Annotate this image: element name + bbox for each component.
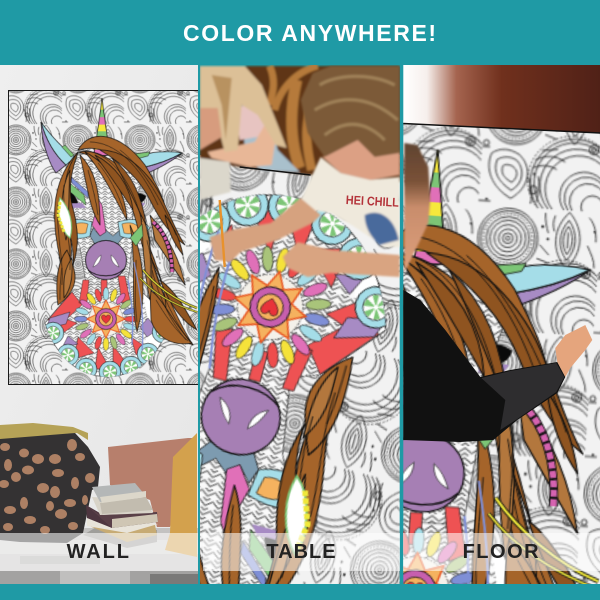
poster edge	[403, 124, 600, 133]
label band: wall: WALL	[67, 540, 131, 562]
black sleeve	[403, 290, 565, 442]
chair	[270, 66, 318, 170]
girl	[200, 66, 300, 172]
book stack	[83, 483, 158, 548]
panel: table	[200, 65, 400, 584]
poster on table	[200, 155, 400, 584]
hand	[555, 325, 592, 377]
label band: table: TABLE	[266, 540, 337, 562]
poster on floor	[403, 120, 600, 584]
poster on wall	[8, 90, 198, 385]
supplies box	[200, 158, 231, 200]
pillow	[108, 438, 197, 527]
label band: table	[203, 533, 400, 571]
panel: wall	[0, 65, 198, 584]
dark patterned bag	[0, 433, 100, 543]
poster edge	[240, 167, 311, 175]
pencil	[220, 200, 225, 267]
label band: floor: FLOOR	[463, 540, 540, 562]
child head	[404, 143, 430, 272]
room behind table	[200, 66, 400, 200]
label band: wall	[0, 533, 198, 571]
wooden floor	[403, 65, 600, 133]
boy	[210, 66, 400, 277]
olive blanket	[0, 423, 88, 440]
title: COLOR ANYWHERE!	[183, 20, 438, 46]
label band: floor	[403, 533, 600, 571]
floor	[0, 528, 198, 584]
panel: floor	[403, 65, 600, 584]
mustard chair	[165, 433, 197, 557]
